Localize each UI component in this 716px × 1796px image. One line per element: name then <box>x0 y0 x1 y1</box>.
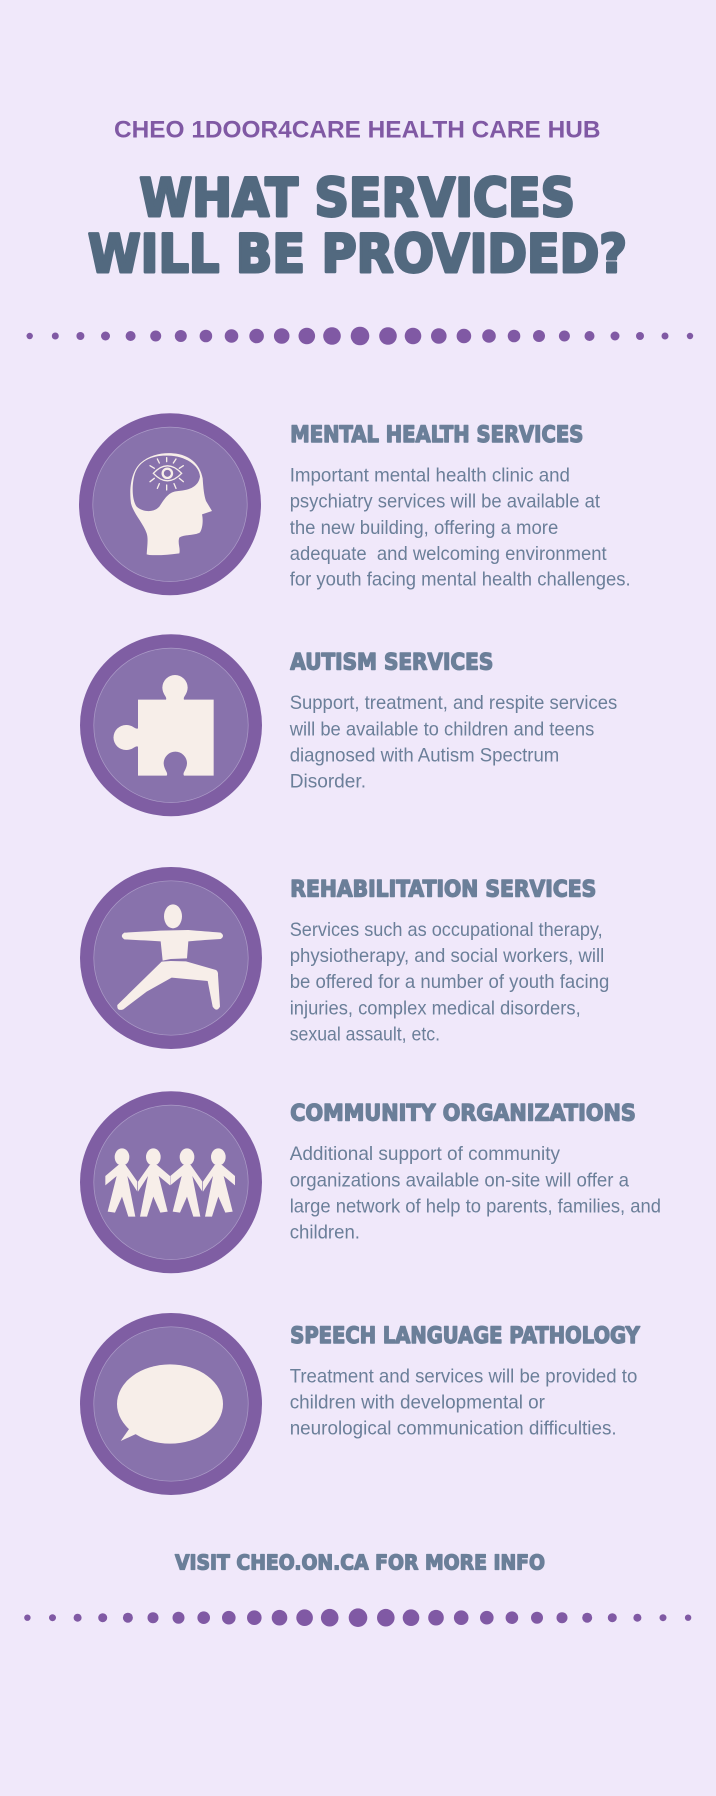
icon: head with brain and eye <box>79 413 261 595</box>
panel: mental health services: Important mental health clinic and <box>290 465 570 487</box>
panel: autism services: Support, treatment, and respite services <box>290 692 618 714</box>
icon: puzzle piece <box>80 634 262 816</box>
panel: speech language pathology: children with developmental or <box>290 1392 545 1414</box>
dotted divider: top <box>26 327 693 345</box>
panel: autism services: will be available to children and teens <box>289 719 595 741</box>
panel: community organizations: Additional support of community <box>290 1143 560 1165</box>
dotted divider: bottom <box>24 1608 691 1627</box>
panel: mental health services <box>290 422 631 591</box>
panel: speech language pathology: SPEECH LANGUAGE PATHOLOGY <box>290 1323 640 1349</box>
panel: rehabilitation services: REHABILITATION SERVICES <box>290 876 596 902</box>
panel: community organizations: large network of help to parents, families, and <box>290 1196 661 1218</box>
panel: mental health services: MENTAL HEALTH SERVICES <box>290 422 583 448</box>
panel: rehabilitation services: be offered for a number of youth facing <box>290 971 609 993</box>
panel: speech language pathology: neurological communication difficulties. <box>290 1418 617 1440</box>
title: WHAT SERVICES <box>140 168 575 229</box>
panel: autism services: diagnosed with Autism Spectrum <box>290 745 559 767</box>
icon: yoga figure <box>80 867 262 1049</box>
panel: community organizations: children. <box>290 1222 360 1244</box>
panel: rehabilitation services: physiotherapy, and social workers, will <box>290 945 604 967</box>
panel: community organizations <box>290 1100 661 1244</box>
icon: speech bubble <box>80 1313 262 1495</box>
panel: autism services: AUTISM SERVICES <box>290 649 493 675</box>
header subtitle: CHEO 1DOOR4CARE HEALTH CARE HUB <box>114 117 600 144</box>
icon: paper chain people <box>80 1091 262 1273</box>
panel: rehabilitation services: sexual assault, etc. <box>290 1024 440 1046</box>
panel: community organizations: COMMUNITY ORGANIZATIONS <box>290 1100 636 1126</box>
panel: speech language pathology: Treatment and services will be provided to <box>290 1366 637 1388</box>
panel: mental health services: the new building, offering a more <box>290 517 558 539</box>
panel: autism services <box>289 649 618 793</box>
panel: speech language pathology <box>290 1323 640 1440</box>
panel: rehabilitation services <box>290 876 609 1046</box>
panel: mental health services: adequate and welcoming environment <box>290 543 607 565</box>
title: WILL BE PROVIDED? <box>88 224 627 285</box>
panel: mental health services: for youth facing mental health challenges. <box>290 569 631 591</box>
panel: rehabilitation services: injuries, complex medical disorders, <box>290 997 581 1019</box>
panel: autism services: Disorder. <box>290 771 366 793</box>
footer call to action: VISIT CHEO.ON.CA FOR MORE INFO <box>175 1551 545 1575</box>
panel: community organizations: organizations available on-site will offer a <box>290 1170 629 1192</box>
panel: rehabilitation services: Services such as occupational therapy, <box>290 919 603 941</box>
panel: mental health services: psychiatry services will be available at <box>290 491 601 513</box>
title <box>88 168 627 285</box>
